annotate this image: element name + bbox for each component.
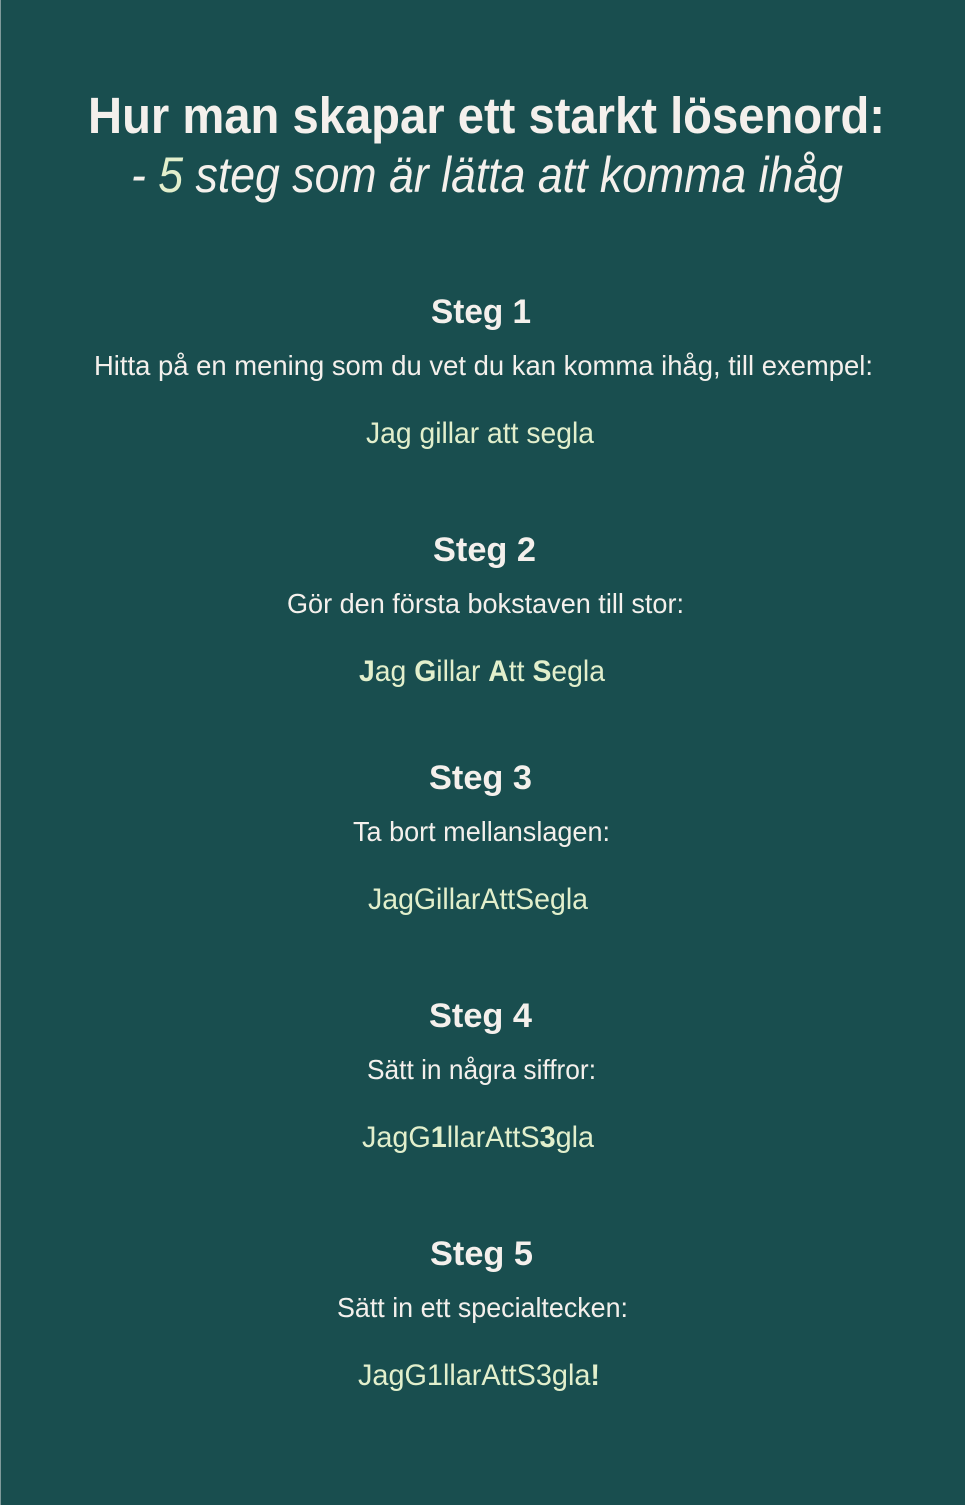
step 4 bbox=[362, 997, 596, 1154]
step 2 heading: Steg 2 bbox=[433, 531, 536, 569]
step 2 bbox=[287, 531, 684, 688]
step 3 example: JagGillarAttSegla bbox=[368, 883, 588, 916]
step 3 bbox=[353, 759, 610, 916]
step 1 instruction: Hitta på en mening som du vet du kan komma ihåg, till exempel: bbox=[94, 350, 873, 381]
step 4 example: JagG1llarAttS3gla bbox=[362, 1121, 594, 1154]
step 5 example: JagG1llarAttS3gla! bbox=[358, 1359, 600, 1392]
step 3 instruction: Ta bort mellanslagen: bbox=[353, 816, 610, 847]
step 5 heading: Steg 5 bbox=[430, 1235, 533, 1273]
step 5 instruction: Sätt in ett specialtecken: bbox=[337, 1292, 628, 1323]
title bbox=[88, 87, 885, 203]
step 2 instruction: Gör den första bokstaven till stor: bbox=[287, 588, 684, 619]
step 1 heading: Steg 1 bbox=[431, 293, 531, 331]
step 2 example: Jag Gillar Att Segla bbox=[359, 655, 605, 688]
step 3 heading: Steg 3 bbox=[429, 759, 532, 797]
title: Hur man skapar ett starkt lösenord: bbox=[88, 87, 885, 144]
step 1 example: Jag gillar att segla bbox=[366, 417, 594, 450]
step 1 bbox=[94, 293, 873, 450]
step 5 bbox=[337, 1235, 628, 1392]
step 4 heading: Steg 4 bbox=[429, 997, 532, 1035]
step 4 instruction: Sätt in några siffror: bbox=[367, 1054, 596, 1085]
subtitle: - 5 steg som är lätta att komma ihåg bbox=[131, 147, 843, 203]
